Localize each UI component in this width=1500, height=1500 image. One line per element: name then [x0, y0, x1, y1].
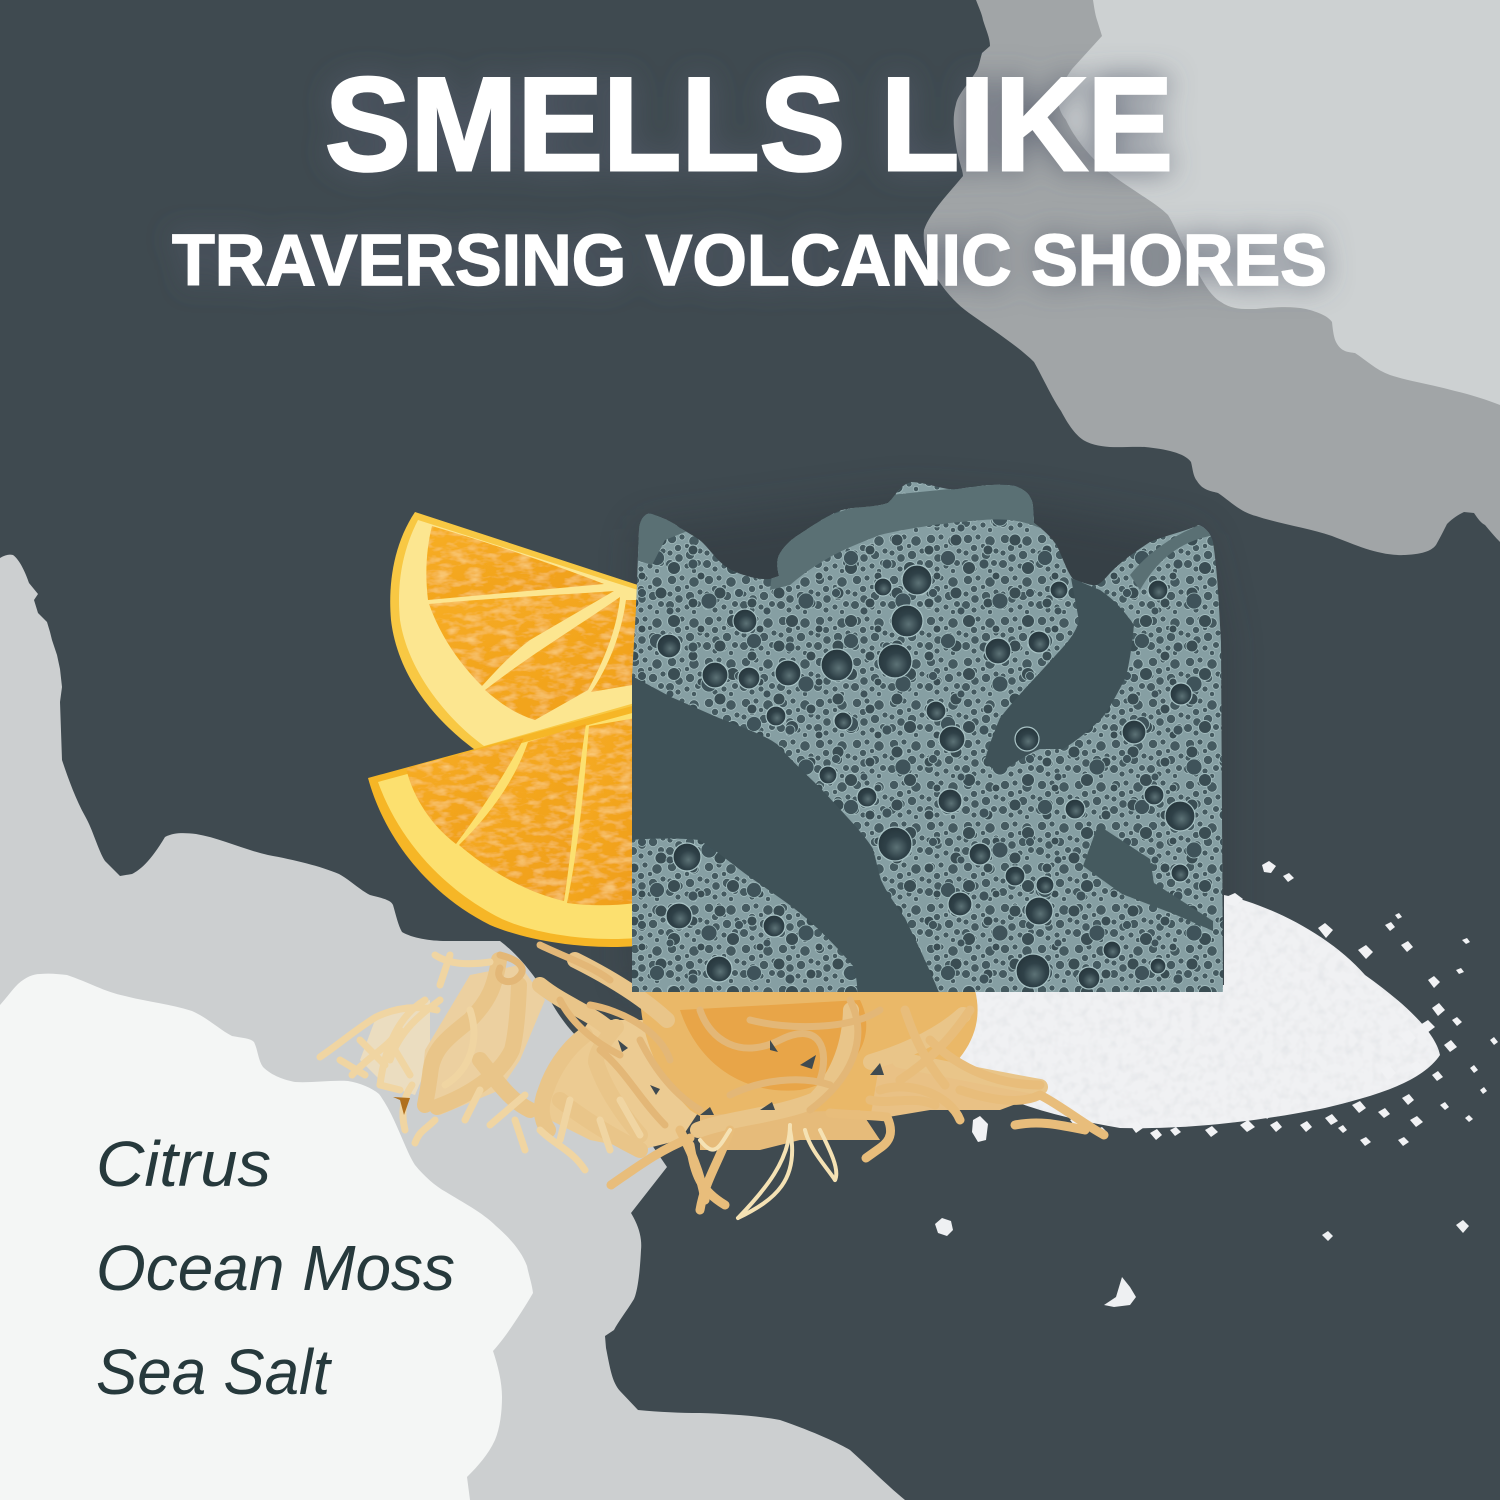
soap: dark patch lower right: [1083, 825, 1213, 931]
shape: top right light grey stone: [1058, 0, 1500, 405]
scattered salt crystals: [935, 1109, 1469, 1307]
soap: dark patch right: [984, 578, 1134, 773]
subtitle: TRAVERSING VOLCANIC SHORES: [172, 221, 1327, 301]
seaweed: dark root tip: [393, 1097, 410, 1115]
seaweed: central mass: [640, 990, 978, 1134]
soap bar: [625, 475, 1230, 1000]
shape: top right mid grey stone: [924, 0, 1500, 555]
scent: ocean moss: Ocean Moss: [96, 1232, 455, 1304]
salt pile: [935, 861, 1498, 1307]
soap drop shadow: [632, 495, 1223, 985]
shape: lower left grey stone: [0, 555, 905, 1500]
seaweed: [320, 945, 1104, 1218]
salt grains: [972, 861, 1498, 1146]
shape: lower left pale stone: [0, 974, 533, 1500]
soap: dark swirl diagonal: [630, 675, 940, 995]
orange slice: lower: [368, 705, 636, 947]
soap: foam surface: [625, 475, 1230, 1000]
scent: sea salt: Sea Salt: [96, 1336, 332, 1408]
lower orange segments: [406, 718, 636, 905]
seaweed: lower mass: [700, 1110, 880, 1150]
seaweed: right mass: [870, 1060, 1040, 1120]
seaweed: left fringe mass: [360, 1000, 430, 1095]
seaweed: orange core: [680, 1000, 866, 1091]
seaweed: left mass: [420, 965, 545, 1115]
orange slice: upper: [390, 512, 638, 752]
scent: citrus: Citrus: [96, 1128, 271, 1200]
upper orange segments: [426, 526, 638, 720]
seaweed: middle mass: [545, 1020, 700, 1150]
title: SMELLS LIKE: [325, 51, 1173, 199]
scent list: [96, 1128, 455, 1408]
seaweed: gaps showing background: [618, 1040, 884, 1115]
soap: large bubbles: [657, 565, 1195, 989]
soap: crown ridge: [632, 480, 1215, 590]
